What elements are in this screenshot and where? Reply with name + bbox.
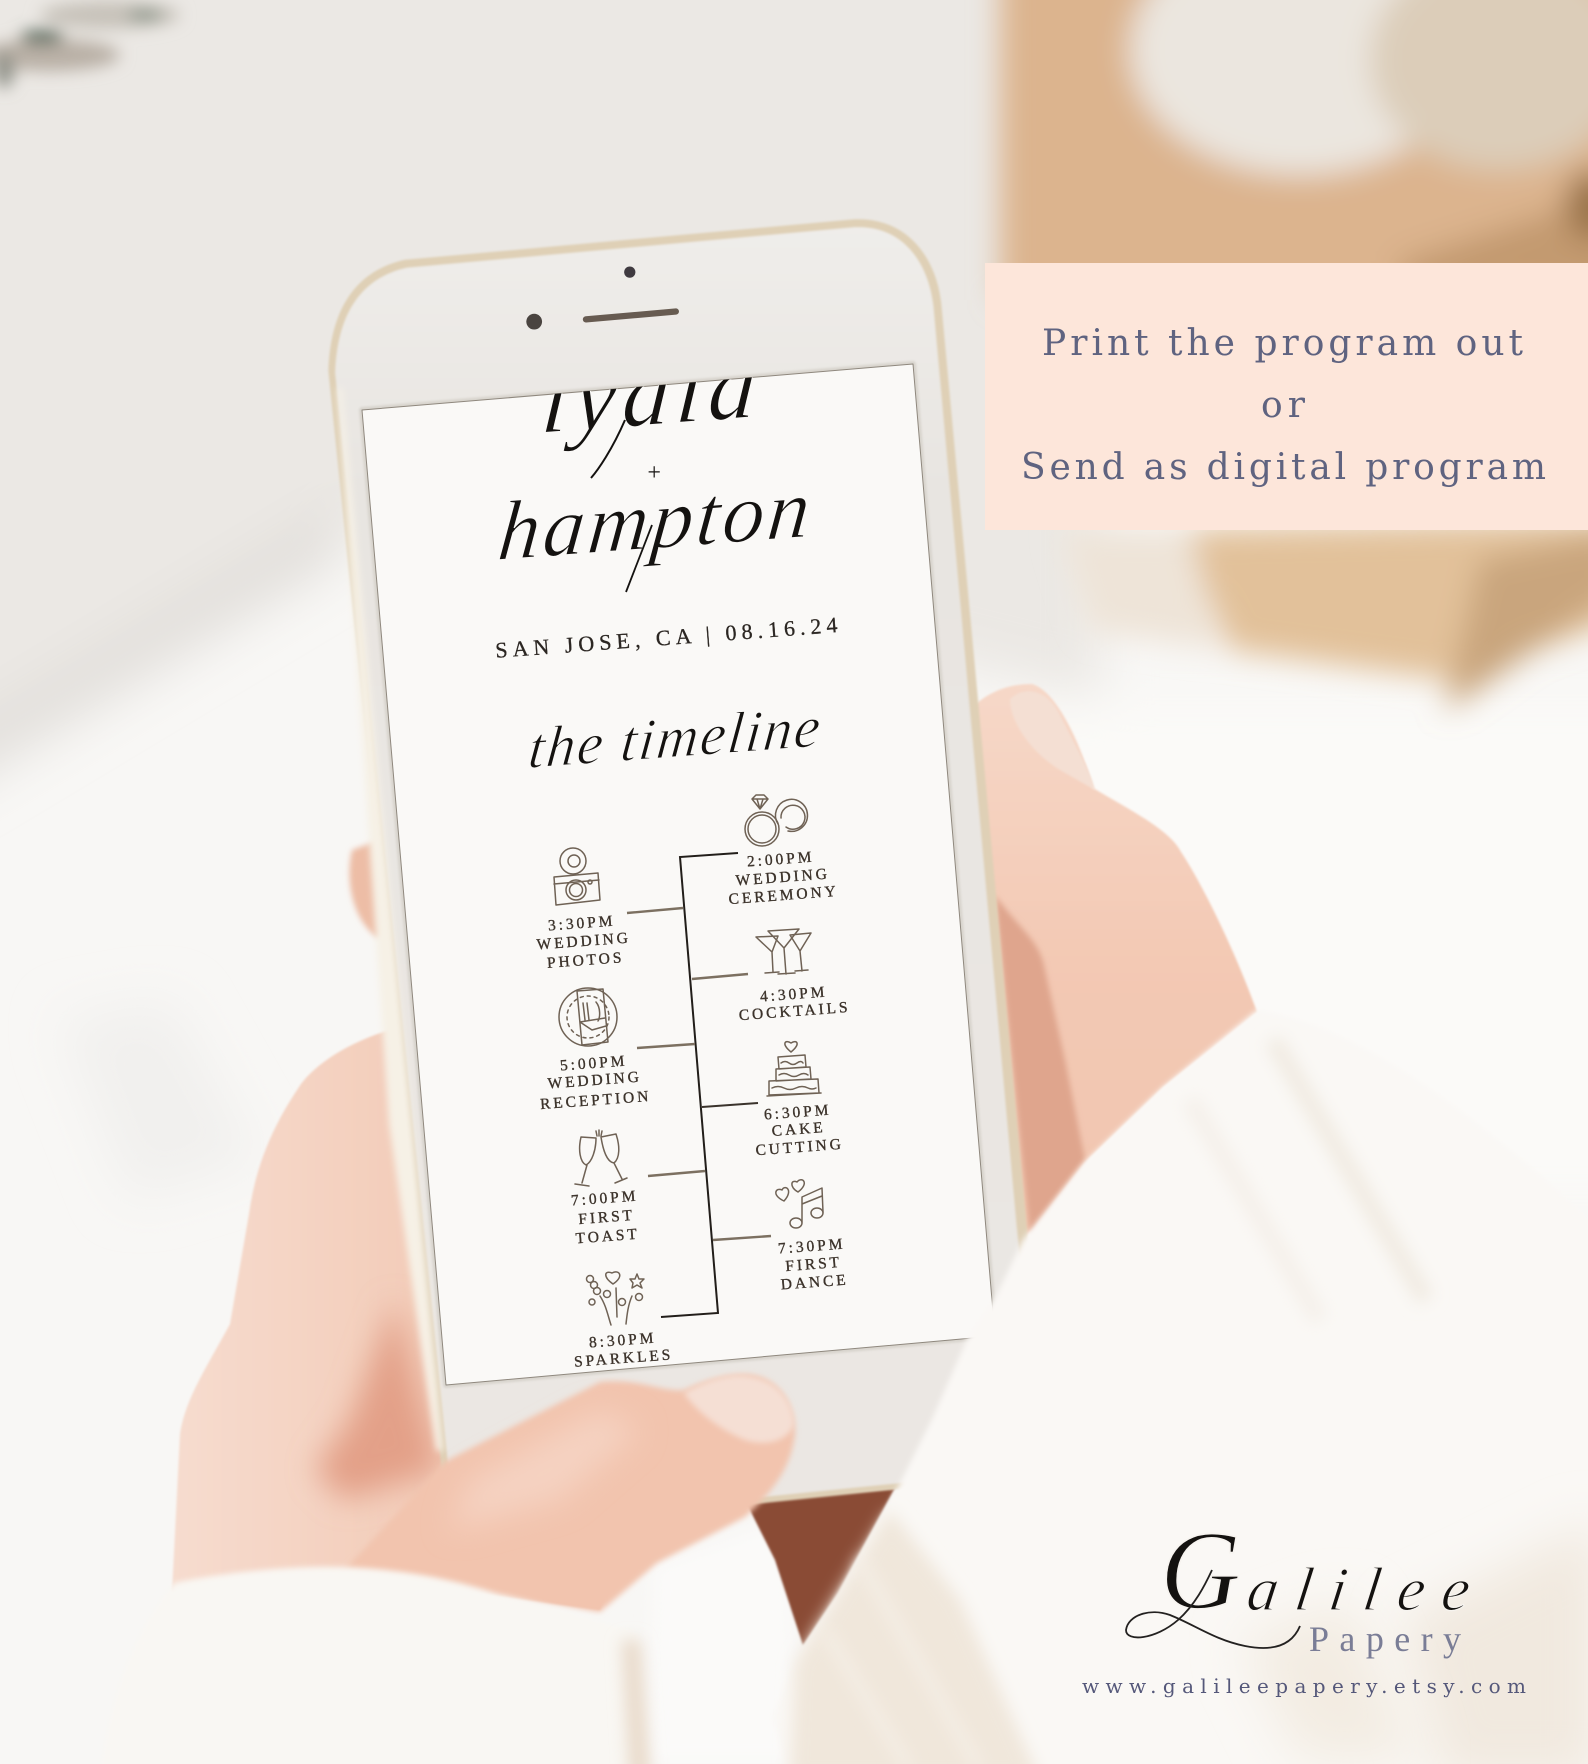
label: 5:00PM wedding reception	[540, 1053, 652, 1113]
label: 7:00PM first toast: FIRST	[578, 1207, 636, 1228]
label: 2:00PM wedding ceremony: WEDDING	[735, 865, 830, 890]
icon: tiered cake	[767, 1042, 821, 1096]
callout: print or send as digital	[985, 263, 1588, 530]
icon: sparklers with heart and star	[586, 1272, 644, 1325]
phone speaker slot	[586, 312, 676, 319]
location and date: SAN JOSE, CA | 08.16.24	[494, 612, 838, 663]
label: 6:30PM cake cutting: CUTTING	[755, 1136, 844, 1159]
callout line: or: or	[1261, 385, 1306, 426]
label: 4:30PM cocktails	[738, 984, 851, 1024]
item: first dance	[776, 1180, 849, 1294]
label: 3:30PM wedding photos: PHOTOS	[546, 949, 625, 972]
item: wedding photos	[536, 848, 631, 972]
label: 7:00PM first toast	[570, 1188, 640, 1247]
dark gap between phone bottom and sweater	[745, 1488, 895, 1645]
shop url: www.galileepapery.etsy.com	[1082, 1674, 1526, 1698]
right hand behind the phone	[349, 684, 1257, 1240]
plus sign: +	[646, 460, 662, 486]
label: 7:00PM first toast: TOAST	[575, 1226, 640, 1247]
phone screen	[362, 331, 995, 1385]
logo word: Papery: Papery	[1309, 1619, 1461, 1659]
item: first toast	[570, 1130, 640, 1247]
label: 7:30PM first dance: DANCE	[780, 1271, 849, 1294]
item: wedding ceremony	[728, 795, 839, 908]
item: wedding reception	[540, 988, 652, 1113]
icon: hearts and music notes	[776, 1180, 823, 1228]
label: 8:30PM sparkles	[574, 1330, 674, 1371]
label: 2:00PM wedding ceremony: 2:00PM	[746, 849, 815, 871]
label: 5:00PM wedding reception: 5:00PM	[559, 1053, 628, 1075]
phone sensor dot	[624, 267, 635, 278]
item: cocktails	[738, 929, 851, 1024]
label: 7:30PM first dance: FIRST	[785, 1254, 843, 1275]
label: 7:30PM first dance: 7:30PM	[777, 1236, 846, 1258]
label: 3:30PM wedding photos: WEDDING	[536, 929, 631, 954]
label: 8:30PM sparkles: 8:30PM	[588, 1330, 657, 1352]
icon: cocktail glasses	[756, 929, 811, 974]
phone camera lens	[526, 314, 542, 330]
label: 2:00PM wedding ceremony: CEREMONY	[728, 883, 839, 908]
label: 6:30PM cake cutting: 6:30PM	[763, 1102, 832, 1124]
script heading: the timeline: the timeline	[526, 694, 823, 781]
label: 2:00PM wedding ceremony	[728, 849, 839, 908]
script name: lydia: lydia	[539, 331, 760, 454]
left sweater cuff	[100, 1567, 650, 1764]
icon: clinking champagne flutes	[575, 1130, 627, 1186]
logo script wordmark: alilee	[1243, 1555, 1475, 1624]
timeline spine and branches	[627, 853, 771, 1317]
label: 6:30PM cake cutting	[755, 1102, 844, 1159]
logo script wordmark: G	[1160, 1509, 1241, 1633]
item: sparklers	[574, 1272, 674, 1371]
label: 7:30PM first dance	[777, 1236, 849, 1294]
label: 6:30PM cake cutting: CAKE	[771, 1119, 826, 1140]
script name: hampton: hampton	[494, 462, 815, 579]
label: 4:30PM cocktails: 4:30PM	[759, 984, 828, 1006]
label: 8:30PM sparkles: SPARKLES	[574, 1346, 674, 1371]
left hand palm behind the phone	[172, 1030, 640, 1610]
label: 7:00PM first toast: 7:00PM	[570, 1188, 639, 1210]
brand logo: Galilee Papery	[1082, 1509, 1526, 1698]
logo script wordmark	[1126, 1509, 1475, 1648]
callout line: send: Send as digital program	[1021, 447, 1546, 488]
icon: plate with napkin and cutlery	[559, 988, 617, 1046]
right sweater sleeve	[772, 1010, 1588, 1764]
label: 4:30PM cocktails: COCKTAILS	[738, 999, 851, 1024]
icon: camera	[554, 848, 600, 905]
script name: lydia	[546, 377, 753, 479]
smartphone body	[328, 219, 1046, 1531]
label: 5:00PM wedding reception: RECEPTION	[540, 1088, 652, 1113]
item: cake cutting	[755, 1042, 844, 1159]
label: 3:30PM wedding photos	[536, 913, 631, 972]
label: 5:00PM wedding reception: WEDDING	[547, 1068, 642, 1093]
label: 3:30PM wedding photos: 3:30PM	[547, 913, 616, 935]
left thumb over the phone	[345, 1374, 795, 1612]
icon: rings and diamond	[745, 795, 807, 846]
callout line: print: Print the program out	[1042, 323, 1524, 364]
